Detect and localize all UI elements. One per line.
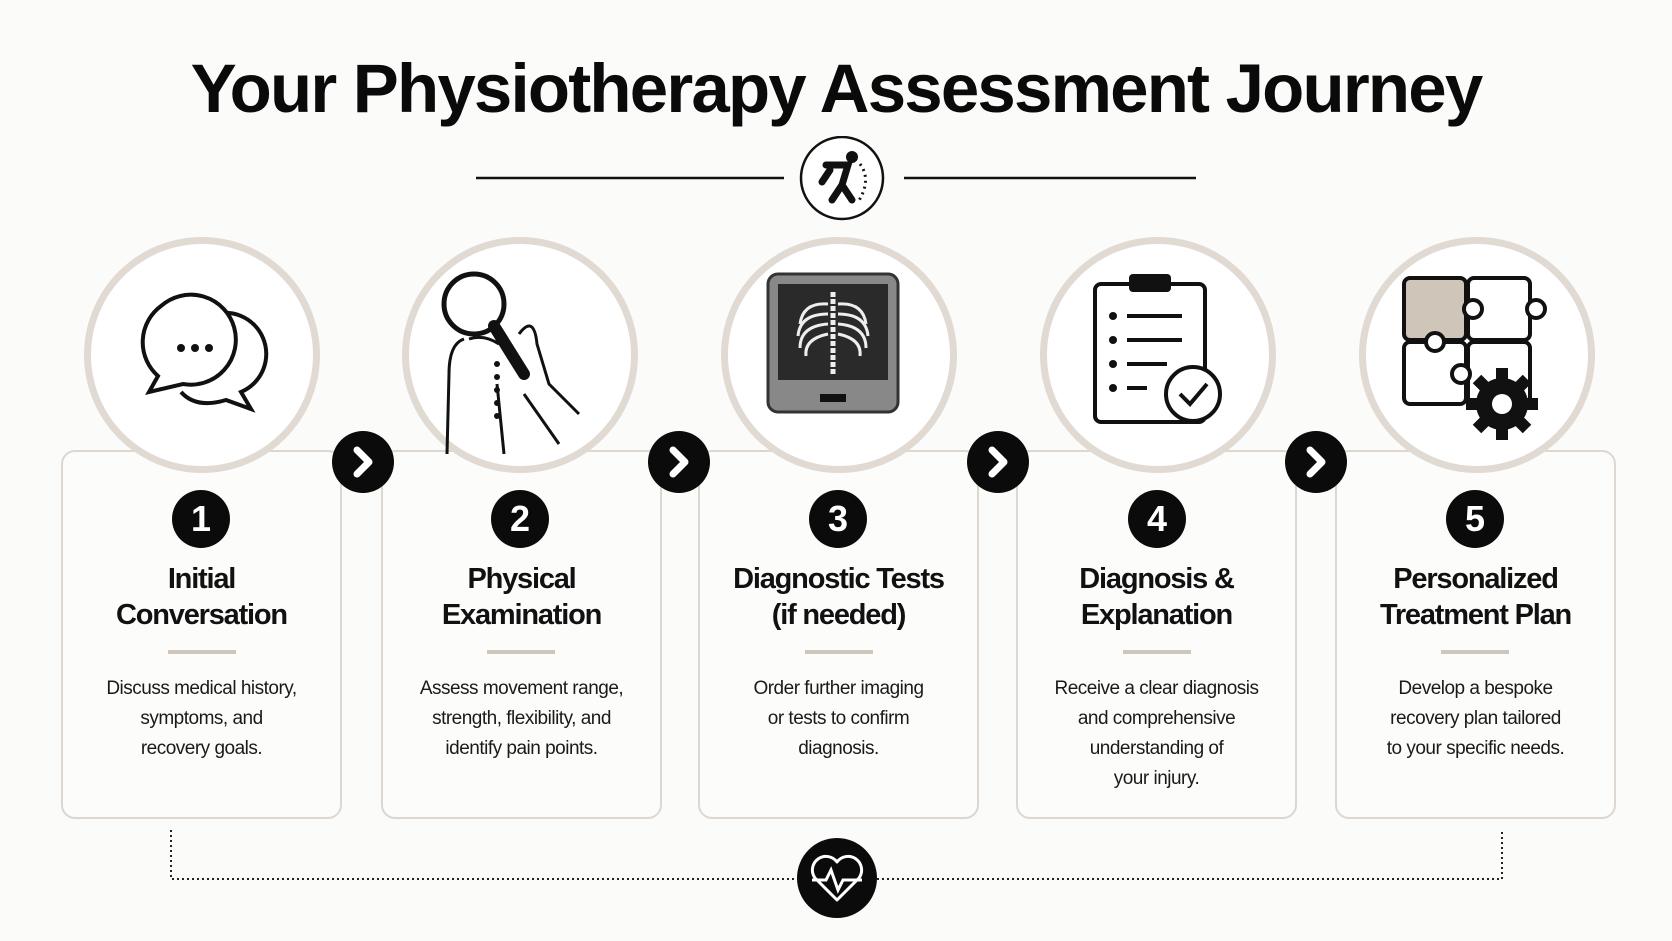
step 1 number: 1 <box>191 498 211 539</box>
step 2 text: identify pain points. <box>445 738 598 759</box>
step 3 text <box>753 678 924 759</box>
header emblem with lines <box>476 136 1196 220</box>
step 4 number <box>1128 490 1186 548</box>
step 5 number: 5 <box>1465 498 1485 539</box>
step 5 heading: Personalized <box>1393 563 1558 595</box>
arrow 2 <box>648 431 710 493</box>
step 4 number: 4 <box>1147 498 1167 539</box>
step 3 text: Order further imaging <box>753 678 924 699</box>
step 2 heading <box>442 563 601 631</box>
step 3 heading <box>733 563 944 631</box>
step 2 number <box>491 490 549 548</box>
card 2 <box>381 450 662 819</box>
step 5 text <box>1387 678 1564 759</box>
step 4 text: Receive a clear diagnosis <box>1054 678 1258 699</box>
step 5 heading: Treatment Plan <box>1380 599 1571 631</box>
step 4 text: and comprehensive <box>1078 708 1235 729</box>
step 2 text <box>420 678 623 759</box>
step 4 text <box>1054 678 1258 789</box>
icon: chat bubbles <box>84 237 320 473</box>
step 1 heading: Conversation <box>116 599 287 631</box>
step 1 heading <box>116 563 287 631</box>
step 3 text: diagnosis. <box>798 738 879 759</box>
title: Your Physiotherapy Assessment Journey <box>191 50 1481 127</box>
step 4 text: understanding of <box>1090 738 1223 759</box>
step 1 number <box>172 490 230 548</box>
arrow 3 <box>967 431 1029 493</box>
step 5 text: to your specific needs. <box>1387 738 1564 759</box>
icon: x-ray <box>721 237 957 473</box>
step 2 text: strength, flexibility, and <box>432 708 611 729</box>
step 2 heading: Physical <box>467 563 576 595</box>
card 4 <box>1016 450 1297 819</box>
step 3 heading: Diagnostic Tests <box>733 563 944 595</box>
step 5 heading <box>1380 563 1571 631</box>
step 3 number: 3 <box>828 498 848 539</box>
step 4 heading: Explanation <box>1081 599 1232 631</box>
step 3 number <box>809 490 867 548</box>
card 5 <box>1335 450 1616 819</box>
step 5 number <box>1446 490 1504 548</box>
card 3 <box>698 450 979 819</box>
card 1 <box>61 450 342 819</box>
step 1 heading: Initial <box>168 563 235 595</box>
bottom bracket with heart icon <box>170 830 1503 918</box>
step 4 heading <box>1079 563 1234 631</box>
step 4 heading: Diagnosis & <box>1079 563 1234 595</box>
step 2 heading: Examination <box>442 599 601 631</box>
step 2 text: Assess movement range, <box>420 678 623 699</box>
icon: physical examination <box>402 237 638 473</box>
step 1 text: symptoms, and <box>140 708 263 729</box>
step 1 text: Discuss medical history, <box>106 678 297 699</box>
step 5 text: Develop a bespoke <box>1398 678 1553 699</box>
step 1 text <box>106 678 297 759</box>
step 3 text: or tests to confirm <box>768 708 909 729</box>
step 1 text: recovery goals. <box>141 738 262 759</box>
icon: puzzle and gear <box>1359 237 1595 473</box>
step 2 number: 2 <box>510 498 530 539</box>
arrow 1 <box>332 431 394 493</box>
step 3 heading: (if needed) <box>772 599 905 631</box>
step 4 text: your injury. <box>1114 768 1199 789</box>
step 5 text: recovery plan tailored <box>1390 708 1561 729</box>
icon: clipboard <box>1040 237 1276 473</box>
arrow 4 <box>1285 431 1347 493</box>
